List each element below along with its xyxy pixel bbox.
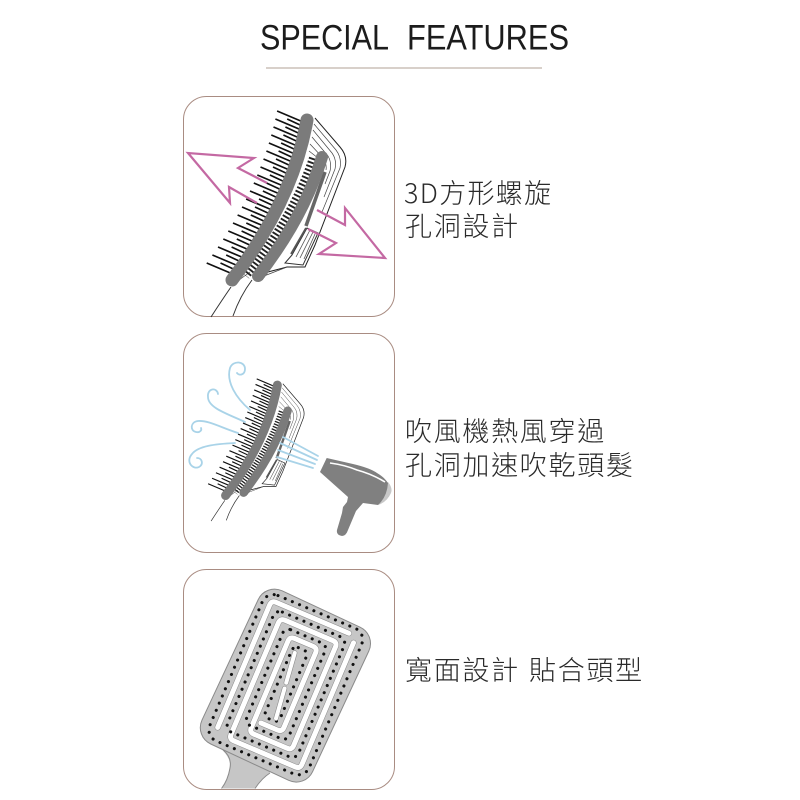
panel: hair dryer airflow: [184, 334, 394, 552]
bristle dots: [205, 591, 366, 778]
arrow: airflow out right: [308, 208, 385, 258]
text: 3D spiral holes: 3D方形螺旋: [404, 172, 552, 211]
short bristles: [220, 119, 302, 270]
icon: brush side view: [207, 111, 346, 317]
text: hair dryer airflow: 吹風機熱風穿過: [405, 417, 606, 447]
icon: hair dryer: [320, 458, 392, 536]
brush back outline: [262, 118, 346, 280]
long bristles: [207, 111, 303, 274]
brush slot: [306, 172, 325, 226]
swirls: air passing out: [189, 362, 318, 468]
rear band: [258, 157, 322, 276]
text: 3D spiral holes: [404, 172, 552, 242]
handle edges: [222, 750, 270, 788]
panel: 3D spiral holes: [184, 96, 394, 317]
icon: brush small: [208, 379, 304, 521]
text: hair dryer airflow: [405, 417, 635, 481]
brush lower vent: [285, 228, 318, 265]
spiral vent edges: [215, 600, 356, 769]
handle lines: [211, 280, 252, 317]
vent hatch lines: [296, 230, 315, 259]
title: FEATURES: [407, 18, 569, 58]
white spiral vents: [215, 600, 356, 769]
text: hair dryer airflow: 孔洞加速吹乾頭髮: [405, 451, 635, 481]
arrow: airflow out left: [188, 153, 267, 203]
comb ladder: [246, 158, 313, 276]
panel: wide brush face: [184, 570, 394, 790]
brush inner contours: [235, 124, 340, 283]
title: [260, 18, 569, 58]
brush face: [194, 583, 376, 788]
brush handle: [215, 743, 282, 788]
text: wide brush face: 寬面設計 貼合頭型: [405, 656, 644, 686]
front band: [232, 120, 307, 280]
text: 3D spiral holes: 孔洞設計: [405, 212, 520, 242]
title: SPECIAL: [260, 18, 389, 58]
center slot: [276, 653, 295, 718]
